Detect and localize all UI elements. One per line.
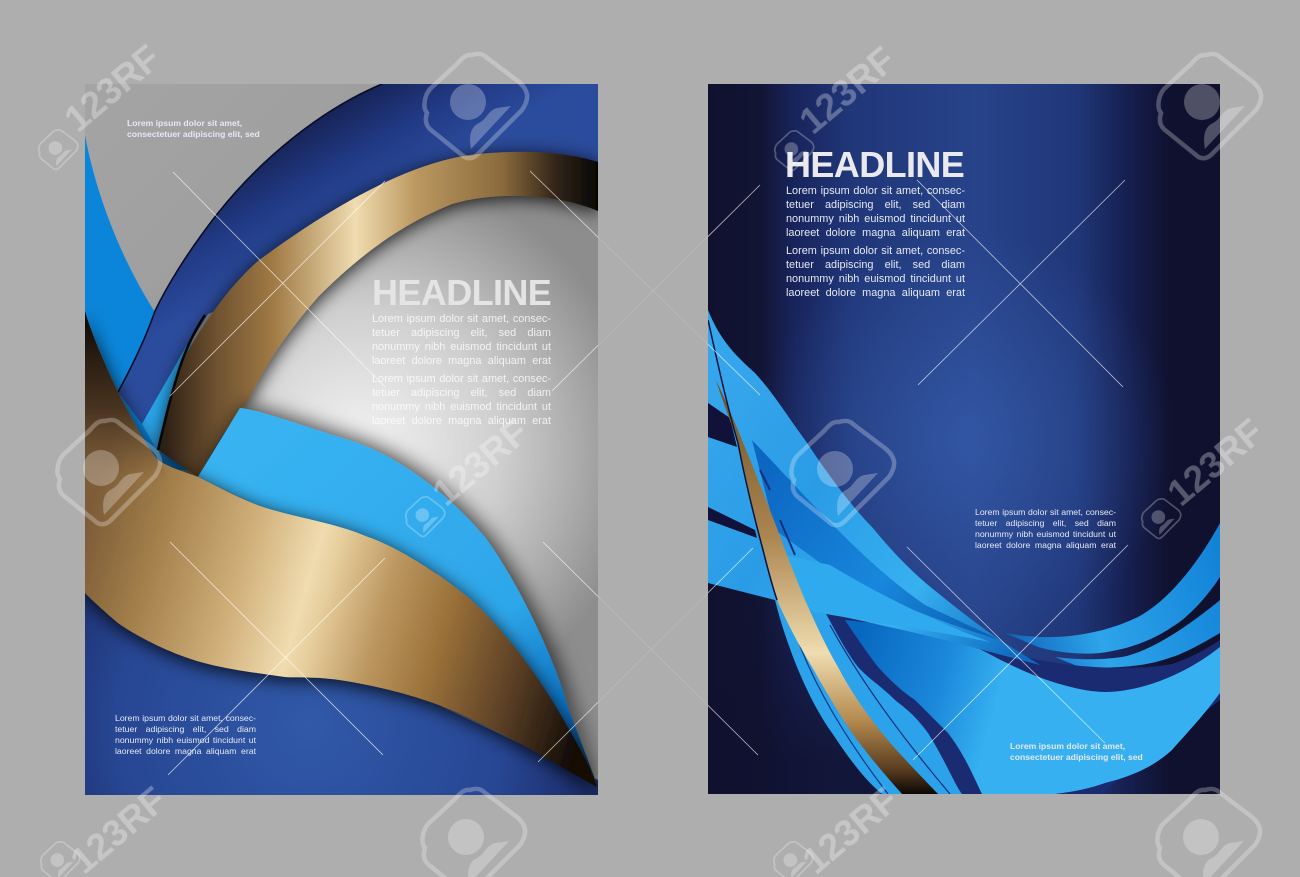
right flyer: body paragraph 1 [786, 185, 965, 239]
right flyer: middle paragraph [975, 507, 1116, 550]
left flyer: body paragraph 2 [372, 373, 551, 427]
left flyer: main gold ribbon [85, 311, 597, 787]
left flyer: top caption: Lorem ipsum dolor sit amet, [127, 118, 242, 128]
right flyer: upper main wave [708, 310, 1040, 665]
right flyer: body paragraph 1: laoreet dolore magna aliquam erat [786, 227, 965, 239]
left flyer: bright blue stripe [85, 135, 188, 470]
right flyer: gold strip [716, 380, 938, 794]
left flyer background and shapes [85, 84, 598, 800]
left flyer: body paragraph 2: nonummy nibh euismod tincidunt ut [372, 401, 551, 413]
left flyer: body paragraph 1: Lorem ipsum dolor sit amet, consec- [372, 313, 551, 325]
left flyer: body paragraph 1: nonummy nibh euismod tincidunt ut [372, 341, 551, 353]
right flyer: main lower band [845, 620, 1220, 794]
left flyer: bottom paragraph: laoreet dolore magna aliquam erat [115, 746, 256, 756]
left flyer: gold arc [158, 152, 598, 477]
watermark: 123RF text: 123RF [425, 411, 536, 514]
right flyer: body paragraph 1: tetuer adipiscing elit, sed diam [786, 199, 965, 211]
left flyer: bottom paragraph: Lorem ipsum dolor sit amet, consec- [115, 713, 256, 723]
left flyer: top caption: consectetuer adipiscing elit, sed [127, 129, 260, 139]
right flyer: body paragraph 2 [786, 245, 965, 299]
right flyer: bottom caption: Lorem ipsum dolor sit amet, [1010, 741, 1125, 751]
right flyer: middle paragraph: nonummy nibh euismod tincidunt ut [975, 529, 1116, 539]
right flyer: middle paragraph: tetuer adipiscing elit, sed diam [975, 518, 1116, 528]
left flyer: bottom blue area [85, 593, 598, 795]
right flyer: bottom caption [1010, 741, 1143, 762]
right flyer: darker facet [752, 440, 1000, 640]
left flyer: headline: HEADLINE [372, 272, 551, 313]
left flyer: bottom paragraph [115, 713, 256, 756]
right flyer: navy underlay [815, 610, 1220, 794]
right flyer: second swoosh [1055, 600, 1220, 668]
watermark: 123RF text: 123RF [57, 37, 168, 140]
left flyer: bottom paragraph: tetuer adipiscing elit, sed diam [115, 724, 256, 734]
right flyer: middle paragraph: Lorem ipsum dolor sit amet, consec- [975, 507, 1116, 517]
right flyer: dark ribbon gaps [708, 403, 757, 538]
left flyer: body paragraph 1 [372, 313, 551, 367]
left flyer: body paragraph 2: Lorem ipsum dolor sit amet, consec- [372, 373, 551, 385]
right flyer: body paragraph 2: nonummy nibh euismod tincidunt ut [786, 273, 965, 285]
right flyer: body paragraph 2: laoreet dolore magna aliquam erat [786, 287, 965, 299]
right flyer: body paragraph 1: Lorem ipsum dolor sit amet, consec- [786, 185, 965, 197]
right flyer: middle paragraph: laoreet dolore magna aliquam erat [975, 540, 1116, 550]
left flyer: top caption [127, 118, 260, 139]
right flyer: body paragraph 1: nonummy nibh euismod tincidunt ut [786, 213, 965, 225]
right flyer: body paragraph 2: Lorem ipsum dolor sit amet, consec- [786, 245, 965, 257]
right flyer: headline: HEADLINE [785, 144, 964, 185]
left flyer: bottom paragraph: nonummy nibh euismod tincidunt ut [115, 735, 256, 745]
left flyer: silver panel [242, 196, 598, 625]
left flyer: body paragraph 1: tetuer adipiscing elit, sed diam [372, 327, 551, 339]
left flyer: body paragraph 2: tetuer adipiscing elit, sed diam [372, 387, 551, 399]
flyer artwork [85, 84, 1220, 795]
left flyer: cyan wave [198, 408, 597, 785]
left flyer: body paragraph 1: laoreet dolore magna aliquam erat [372, 355, 551, 367]
left flyer: dark blue band [118, 84, 598, 424]
right flyer: lighter facet [785, 555, 990, 642]
watermark: 123RF text: 123RF [1160, 411, 1271, 514]
watermark: diagonal cross lines [168, 171, 1128, 775]
left flyer: body paragraph 2: laoreet dolore magna aliquam erat [372, 415, 551, 427]
left flyer: blue sliver [142, 344, 192, 452]
right flyer: upper swoosh [1005, 523, 1220, 654]
right flyer: body paragraph 2: tetuer adipiscing elit, sed diam [786, 259, 965, 271]
right flyer: bottom caption: consectetuer adipiscing elit, sed [1010, 752, 1143, 762]
watermark: 123RF text: 123RF [792, 39, 903, 142]
right flyer: outer lower band [775, 600, 962, 794]
right flyer background and waves [708, 84, 1220, 794]
